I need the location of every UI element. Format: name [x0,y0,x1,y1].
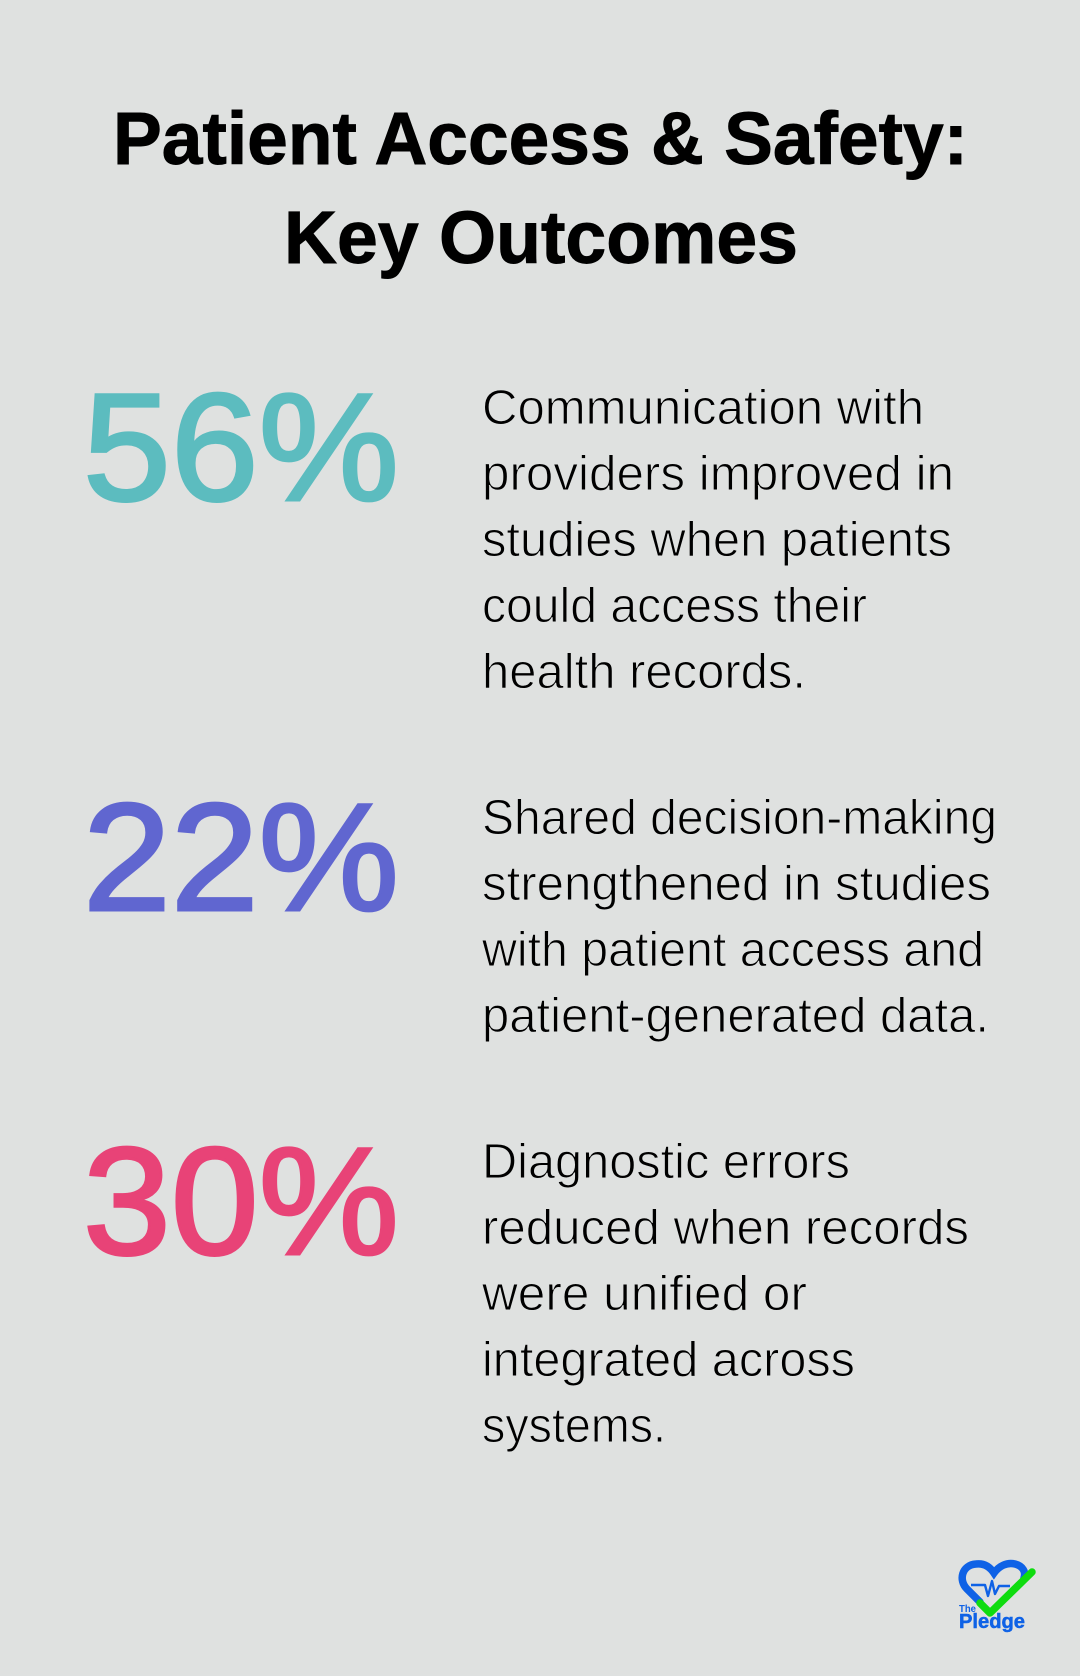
text block: shared decision-making [481,791,997,1043]
text block: diagnostic errors [481,1135,969,1453]
text block: communication: studies when patients [482,513,952,567]
panel: stat 56% [83,362,954,699]
text block: diagnostic errors: Diagnostic errors [482,1135,850,1189]
text block: communication [482,381,954,699]
icon: The Pledge logo: Pledge [959,1611,1025,1633]
text block: communication: providers improved in [482,447,954,501]
stat number: 30%: 30% [83,1116,399,1287]
text block: diagnostic errors: systems. [482,1399,666,1453]
text block: communication: health records. [482,645,806,699]
panel: stat 30% [83,1116,969,1453]
title: Patient Access & Safety: [113,97,968,180]
text block: communication: Communication with [482,381,924,435]
text block: diagnostic errors: reduced when records [482,1201,969,1255]
title: Key Outcomes [284,196,798,279]
text block: diagnostic errors: were unified or [481,1267,807,1321]
icon: The Pledge logo: The [959,1604,976,1615]
icon: The Pledge logo [959,1563,1032,1633]
text block: shared decision-making: patient-generated data. [482,989,989,1043]
stat number: 22%: 22% [83,772,399,943]
text block: shared decision-making: Shared decision-making [482,791,997,845]
text block: shared decision-making: with patient access and [481,923,984,977]
text block: diagnostic errors: integrated across [482,1333,855,1387]
text block: shared decision-making: strengthened in studies [482,857,991,911]
title [113,97,968,279]
stat number: 56%: 56% [83,362,399,533]
panel: stat 22% [83,772,997,1043]
text block: communication: could access their [482,579,867,633]
